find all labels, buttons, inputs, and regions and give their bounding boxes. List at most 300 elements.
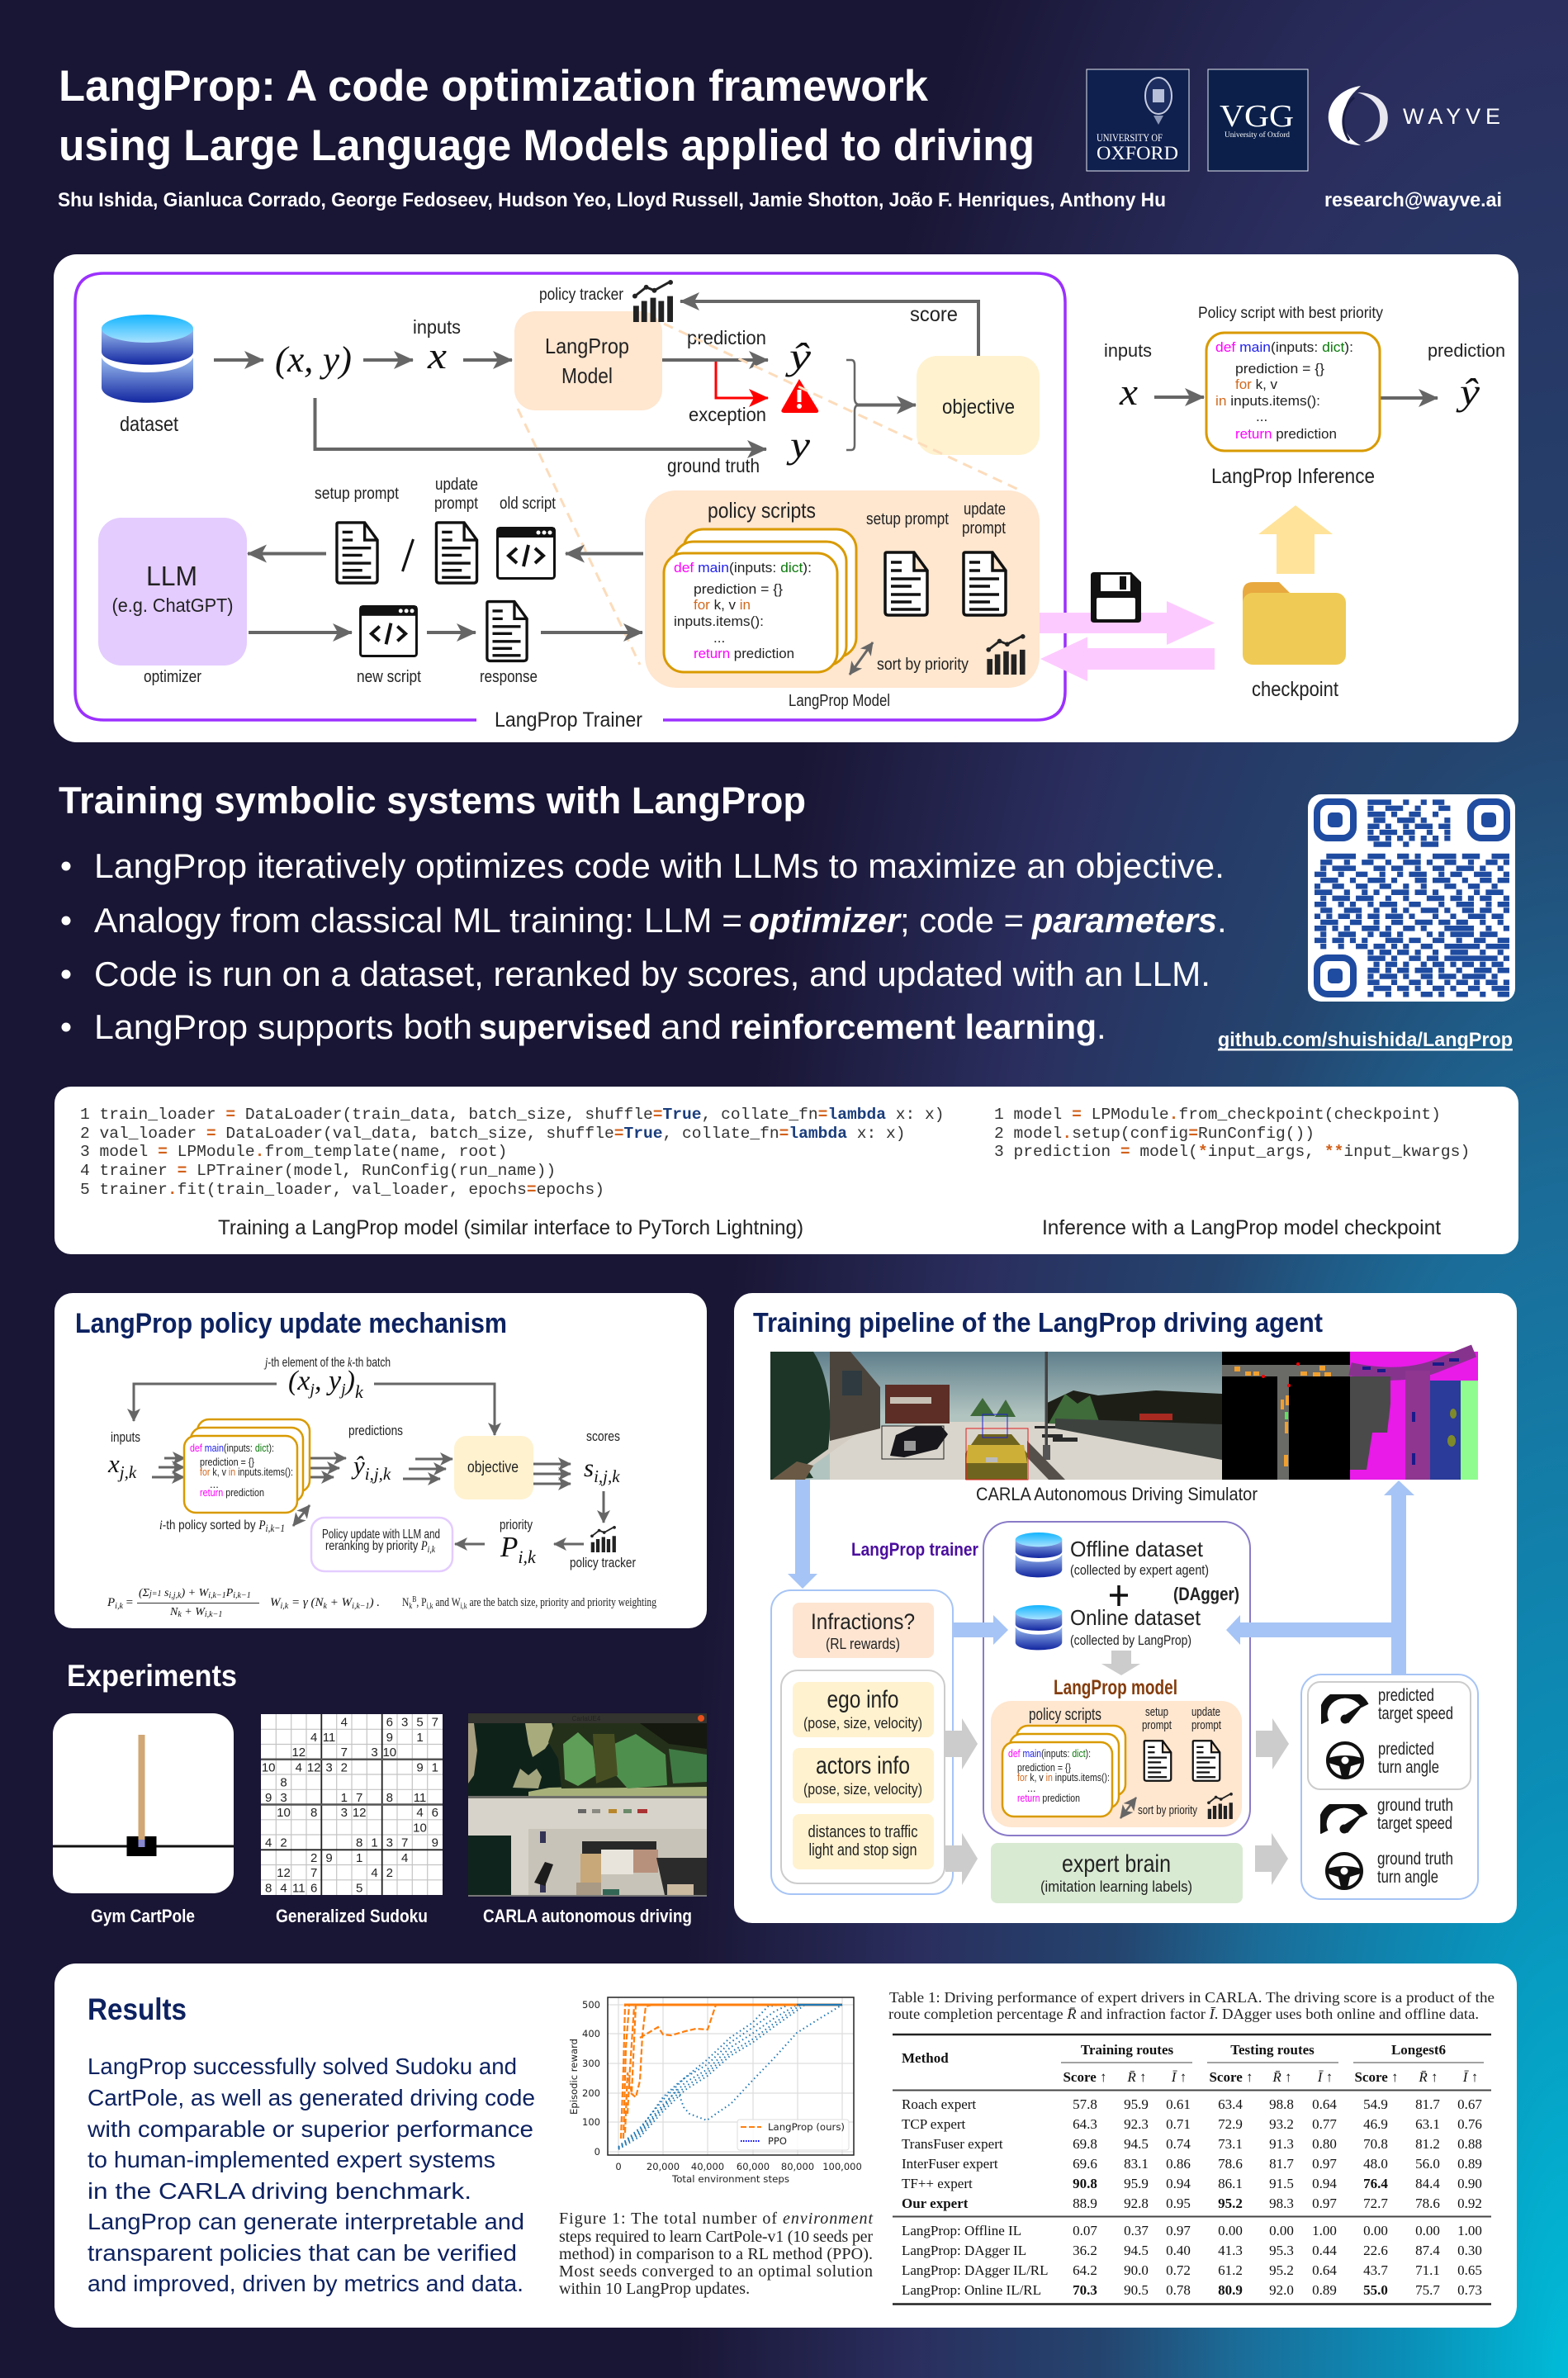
math: priority: i,k [518, 1547, 537, 1567]
image: Generalized Sudoku: 1 [416, 1731, 424, 1745]
icon: floppy disk [1091, 572, 1141, 623]
code snippet: inputs.items(): [674, 613, 764, 629]
container: datasets and model [983, 1522, 1250, 1836]
axis tick labels: 400 [582, 2028, 600, 2039]
panel: training pipeline [734, 1293, 1517, 1923]
header: contact email: research@wayve.ai [1324, 189, 1502, 211]
label: response: response [480, 668, 538, 686]
table header: Score ↑ [1209, 2069, 1253, 2085]
table rows: LangProp: 61.2 [1218, 2262, 1243, 2278]
icon: dataset [102, 315, 193, 403]
box: LLM: (e.g. ChatGPT) [112, 594, 233, 616]
label: online dataset: (collected by LangProp) [1070, 1632, 1191, 1648]
formula: priority update: P [107, 1596, 115, 1609]
code: inference: 3 prediction = model(*input_args, **input_kwargs) [994, 1143, 1470, 1161]
code: training: 1 train_loader = DataLoader(train_data, batch_size, shuffle=True, collate_fn=lambda x: x) [80, 1106, 945, 1124]
icon: offline dataset [1016, 1532, 1062, 1577]
image: Generalized Sudoku: 10 [382, 1746, 396, 1760]
table header: Ī ↑ [1462, 2069, 1478, 2085]
box: LangProp model: sort by priority [1138, 1803, 1197, 1817]
code: inference [994, 1106, 1470, 1161]
box: distances: distances to traffic [808, 1823, 918, 1841]
results summary text: LangProp can generate interpretable and [88, 2209, 524, 2234]
axis tick labels [582, 1999, 862, 2172]
icon: setup prompt doc [337, 523, 377, 583]
image: Generalized Sudoku: 8 [386, 1791, 393, 1805]
image: Generalized Sudoku: 8 [356, 1836, 362, 1850]
gray arrows: to outputs [945, 1718, 1289, 1885]
math: priority: P [500, 1531, 518, 1563]
box: LangProp model: def main(inputs: dict): [1008, 1748, 1091, 1760]
table rows: experts: 88.9 [1073, 2196, 1097, 2211]
table rows: experts: 0.64 [1312, 2096, 1337, 2112]
table rows: experts: 98.8 [1269, 2096, 1294, 2112]
panel: LangProp Model details: policy scripts [708, 498, 816, 523]
box: objective: objective [942, 396, 1015, 419]
table rows: experts: 0.67 [1457, 2096, 1482, 2112]
math: predictions: i,j,k [365, 1464, 391, 1484]
label: policy script with best priority: Policy script with best priority [1198, 305, 1383, 322]
y axis label: Episodic reward [568, 2039, 580, 2115]
table header: Method [902, 2050, 949, 2066]
series: PPO [618, 2005, 842, 2149]
table rows: experts: 48.0 [1363, 2156, 1388, 2172]
math: predictions: ŷ [353, 1451, 365, 1480]
formula: priority update: i,k [427, 1602, 433, 1611]
table rows: experts: 91.3 [1269, 2136, 1294, 2152]
image: Generalized Sudoku: 7 [341, 1746, 348, 1760]
table rows: experts: 54.9 [1363, 2096, 1388, 2112]
image: Generalized Sudoku: 9 [432, 1836, 438, 1850]
image: Generalized Sudoku: 2 [341, 1760, 348, 1774]
box: LLM: LLM [146, 561, 197, 591]
table header: R̄ ↑ [1126, 2069, 1147, 2085]
image: Generalized Sudoku: 7 [310, 1866, 317, 1880]
table header: Testing routes [1230, 2042, 1315, 2058]
icon: old script [497, 528, 555, 578]
logo: VGG [1208, 69, 1308, 171]
logo: VGG: VGG [1220, 99, 1294, 134]
arrow: checkpoint to inference [1258, 505, 1333, 574]
arrow: exception [716, 362, 768, 398]
results summary text: and improved, driven by metrics and data. [88, 2271, 523, 2296]
label: scores: scores [586, 1428, 620, 1444]
table rows: experts: 84.4 [1415, 2176, 1440, 2191]
bullet list [61, 846, 1227, 1046]
math: batch: , y [315, 1366, 342, 1396]
table rows: experts: 0.88 [1457, 2136, 1482, 2152]
table rows: LangProp: 94.5 [1124, 2243, 1149, 2258]
image: Generalized Sudoku: 9 [265, 1791, 272, 1805]
results summary text [87, 2054, 535, 2296]
formula: priority update: k [324, 1602, 328, 1611]
table rows: experts: 95.2 [1218, 2196, 1243, 2211]
label: old script: old script [500, 495, 556, 513]
formula: priority update: = γ (N [288, 1596, 324, 1609]
formula: priority update [107, 1587, 656, 1619]
table rows: experts: TF++ expert [902, 2176, 973, 2191]
box: objective: objective [467, 1459, 519, 1476]
formula: priority update: ) . [369, 1596, 380, 1609]
table rows: experts: 0.61 [1166, 2096, 1191, 2112]
box: policy update [311, 1518, 452, 1571]
image: Generalized Sudoku: 11 [414, 1791, 426, 1805]
table rows: experts: 63.1 [1415, 2116, 1440, 2132]
table rows: experts: 73.1 [1218, 2136, 1243, 2152]
code box: inference: for k, v [1235, 377, 1278, 392]
math: inputs: j,k [117, 1462, 137, 1482]
table rows: LangProp: 0.97 [1166, 2223, 1191, 2238]
table rows: experts: 83.1 [1124, 2156, 1149, 2172]
arrow: simulator to online dataset [1226, 1615, 1391, 1645]
formula: priority update: are the batch size, priority and priority weighting [467, 1596, 656, 1609]
label: offline dataset [1070, 1537, 1209, 1578]
box: actors info: actors info [816, 1752, 910, 1779]
table rows: experts: Our expert [902, 2196, 969, 2211]
header: title: using Large Language Models applied to driving [59, 121, 1035, 170]
table header: Training routes [1081, 2042, 1174, 2058]
bullet list: Code is run on a dataset, reranked by scores, and updated with an LLM. [94, 955, 1210, 993]
formula: priority update: i,k [115, 1602, 123, 1611]
formula: priority update: i,k [281, 1602, 289, 1611]
table rows: experts: 0.77 [1312, 2116, 1337, 2132]
code: training: 4 trainer = LPTrainer(model, RunConfig(run_name)) [80, 1162, 556, 1180]
arrow: simulator to trainer [788, 1480, 817, 1589]
logo: University of Oxford [1087, 69, 1189, 171]
table rows: experts: 0.71 [1166, 2116, 1191, 2132]
panel: results [54, 1964, 1517, 2328]
box: policy update: i,k [428, 1543, 436, 1555]
table rows: LangProp: LangProp: Offline IL [902, 2223, 1021, 2238]
code box: inference: prediction = {} [1235, 361, 1324, 377]
image: Generalized Sudoku: 3 [341, 1806, 348, 1820]
image: Generalized Sudoku: 6 [386, 1716, 393, 1730]
table rows: LangProp: 22.6 [1363, 2243, 1388, 2258]
table rows: experts: 69.6 [1073, 2156, 1097, 2172]
header: authors: Shu Ishida, Gianluca Corrado, George Fedoseev, Hudson Yeo, Lloyd Russell, Jamie Shotton, João F. Henriques, Anthony Hu [58, 189, 1166, 211]
container: outputs: target speed [1377, 1814, 1452, 1833]
box: LangProp Model: LangProp [545, 334, 629, 358]
arrows: inference [1154, 397, 1438, 398]
table rows: experts: Roach expert [902, 2096, 976, 2112]
math: batch: k [355, 1381, 364, 1402]
table caption: Table 1: Driving performance of expert drivers in CARLA. The driving score is a product of the [889, 1989, 1495, 2006]
image: CARLA aerial view [468, 1713, 707, 1897]
table rows: experts: 78.6 [1415, 2196, 1440, 2211]
table rows: experts: 98.3 [1269, 2196, 1294, 2211]
image: Generalized Sudoku: 4 [371, 1866, 378, 1880]
code snippet: return prediction [694, 646, 794, 661]
icon: tracker [590, 1526, 616, 1552]
formula: priority update: W [270, 1596, 281, 1609]
code box: inference [1206, 333, 1380, 451]
code snippet: prediction = {} [694, 581, 783, 597]
plus sign [1110, 1585, 1128, 1606]
label: DAgger: (DAgger) [1173, 1584, 1239, 1604]
axis tick labels: 40,000 [691, 2161, 724, 2172]
table rows: experts: 0.94 [1312, 2176, 1337, 2191]
image: Generalized Sudoku: 3 [325, 1760, 333, 1774]
labels: experiments: Generalized Sudoku [276, 1906, 428, 1926]
table rows: experts: 0.74 [1166, 2136, 1191, 2152]
icon: update prompt document [964, 552, 1006, 615]
box: distances: light and stop sign [809, 1841, 917, 1859]
formula: priority update: i,j,k [168, 1591, 182, 1600]
image: Generalized Sudoku: 6 [310, 1881, 317, 1895]
labels: experiments: Gym CartPole [91, 1906, 195, 1926]
bullet list: . [1217, 901, 1227, 940]
image: Generalized Sudoku: 10 [262, 1760, 276, 1774]
label: LangProp trainer: LangProp trainer [851, 1539, 978, 1560]
table rows: LangProp: 90.0 [1124, 2262, 1149, 2278]
axis tick labels: 0 [615, 2161, 622, 2172]
label: sorted policy: i,k−1 [266, 1522, 285, 1534]
image: Generalized Sudoku: 2 [310, 1851, 317, 1865]
bullet list: Analogy from classical ML training: LLM = [94, 901, 742, 940]
box: LangProp model: prompt [1142, 1718, 1172, 1732]
math: (x, y): (x, y) [275, 339, 352, 380]
formula: priority update: i,k [461, 1602, 467, 1611]
table rows: experts: 76.4 [1363, 2176, 1388, 2191]
heading: LangProp policy update mechanism [75, 1308, 507, 1339]
image: Generalized Sudoku: 4 [416, 1806, 424, 1820]
code: training: 2 val_loader = DataLoader(val_data, batch_size, shuffle=True, collate_fn=lambda x: x) [80, 1125, 906, 1143]
label: offline dataset: (collected by expert agent) [1070, 1562, 1209, 1578]
label: update prompt: prompt [434, 495, 478, 513]
x axis label: Total environment steps [671, 2173, 789, 2185]
table rows: experts: 0.94 [1166, 2176, 1191, 2191]
label: inputs: inputs [1104, 340, 1152, 361]
table rows: experts [902, 2096, 1482, 2211]
axis tick labels: 100,000 [822, 2161, 862, 2172]
box: LangProp model: update [1191, 1705, 1220, 1719]
label: simulator: CARLA Autonomous Driving Simulator [976, 1484, 1258, 1504]
formula: priority update: k [178, 1610, 182, 1619]
table rows: experts: 0.95 [1166, 2196, 1191, 2211]
table rows: LangProp: 0.00 [1269, 2223, 1294, 2238]
box: LangProp model: policy scripts [1029, 1706, 1101, 1724]
formula: priority update: , P [416, 1596, 427, 1609]
table rows: LangProp: 64.2 [1073, 2262, 1097, 2278]
image: Generalized Sudoku: 11 [323, 1731, 335, 1745]
panel: LangProp Model details: prompt [962, 519, 1006, 538]
table rows: LangProp: 0.37 [1124, 2223, 1149, 2238]
arrows: batch routing [134, 1384, 604, 1544]
container: outputs: turn angle [1378, 1758, 1439, 1777]
axis tick labels: 300 [582, 2058, 600, 2069]
label: priority: priority [500, 1517, 533, 1532]
table header: Ī ↑ [1171, 2069, 1187, 2085]
axis tick labels: 0 [595, 2146, 600, 2158]
formula: priority update: i,k−1 [208, 1591, 226, 1600]
header: title [59, 62, 1035, 170]
table rows: LangProp: 0.40 [1166, 2243, 1191, 2258]
formula: priority update: P [225, 1587, 234, 1599]
table rows: experts: InterFuser expert [902, 2156, 998, 2172]
image: Generalized Sudoku: 4 [280, 1881, 287, 1895]
results summary text: in the CARLA driving benchmark. [88, 2178, 471, 2204]
icon: new script [360, 606, 417, 656]
math: y: y [786, 424, 811, 466]
table rows: LangProp: 1.00 [1457, 2223, 1482, 2238]
icon: policy tracker [632, 280, 673, 322]
results summary text: CartPole, as well as generated driving code [88, 2085, 535, 2110]
dashed links [518, 324, 1022, 665]
chart legend: LangProp (ours) [768, 2121, 845, 2133]
figure caption: method) in comparison to a RL method (PPO). [559, 2245, 873, 2263]
arrows: LLM loop [248, 553, 643, 632]
policy stack [184, 1419, 310, 1513]
code snippet: def main(inputs: dict): [674, 560, 812, 576]
table rows: experts: 92.3 [1124, 2116, 1149, 2132]
box: LangProp model: return prediction [1017, 1793, 1080, 1804]
code: training [80, 1106, 945, 1199]
table rows: LangProp: LangProp: DAgger IL [902, 2243, 1026, 2258]
table rows: experts: 81.7 [1415, 2096, 1440, 2112]
label: LangProp model: LangProp model [1054, 1676, 1177, 1699]
chart legend: PPO [768, 2135, 787, 2147]
label: prediction: prediction [687, 327, 766, 348]
table rows: experts: 92.8 [1124, 2196, 1149, 2211]
label: online dataset: Online dataset [1070, 1605, 1201, 1630]
panel: LangProp Model details: sort by priority [877, 656, 969, 674]
table rows: experts: 78.6 [1218, 2156, 1243, 2172]
table rows: experts: 57.8 [1073, 2096, 1097, 2112]
figure caption: steps required to learn CartPole-v1 (10 seeds per [559, 2228, 873, 2246]
arrow: sort by priority [850, 642, 873, 675]
image: Generalized Sudoku: 8 [280, 1776, 287, 1790]
logo: Wayve: WAYVE [1403, 104, 1500, 129]
math: batch: j [339, 1381, 346, 1399]
table rows: experts: 0.89 [1457, 2156, 1482, 2172]
image: Generalized Sudoku [261, 1714, 443, 1895]
table header: R̄ ↑ [1272, 2069, 1292, 2085]
table rows: experts: 81.2 [1415, 2136, 1440, 2152]
box: LangProp model: ... [1027, 1783, 1035, 1794]
table rows: LangProp: 92.0 [1269, 2282, 1294, 2298]
math: inputs: x [108, 1449, 120, 1478]
table caption: route completion percentage R̄ and infraction factor Ī. DAgger uses both online and offline data. [888, 2006, 1479, 2022]
icon: folder checkpoint [1243, 582, 1346, 665]
code box: inference: def main(inputs: dict): [1215, 339, 1353, 355]
policy stack: for k, v in inputs.items(): [200, 1466, 293, 1478]
box: expert brain [991, 1843, 1243, 1903]
figure caption: within 10 LangProp updates. [559, 2280, 750, 2298]
code: training: 3 model = LPModule.from_template(name, root) [80, 1143, 507, 1161]
label: dataset: dataset [120, 413, 178, 436]
container: inputs [771, 1590, 953, 1894]
table header: R̄ ↑ [1418, 2069, 1438, 2085]
bullet list: ; code = [900, 901, 1024, 940]
arrows: save and load checkpoint [1040, 601, 1215, 681]
box: objective [917, 356, 1040, 455]
label: optimizer: optimizer [144, 668, 201, 686]
box: ego info: ego info [827, 1686, 898, 1713]
image: Generalized Sudoku: 10 [277, 1806, 291, 1820]
table rows: experts: 0.76 [1457, 2116, 1482, 2132]
axis tick labels: 60,000 [737, 2161, 770, 2172]
box: LangProp model: for k, v in inputs.items(): [1017, 1772, 1110, 1784]
label: checkpoint: checkpoint [1252, 678, 1338, 701]
container: outputs: predicted [1378, 1686, 1434, 1705]
container: outputs: predicted [1378, 1740, 1434, 1759]
table rows: LangProp: 36.2 [1073, 2243, 1097, 2258]
math: batch: (x [288, 1366, 310, 1396]
box: LangProp model: prompt [1191, 1718, 1222, 1732]
logo: University of Oxford: OXFORD [1097, 143, 1178, 163]
image: Generalized Sudoku: 3 [401, 1716, 408, 1730]
heading: experiments: Experiments [67, 1659, 237, 1693]
label: policy tracker: policy tracker [539, 286, 623, 304]
logo: Wayve [1329, 86, 1500, 145]
labels: experiments: CARLA autonomous driving [483, 1906, 692, 1926]
arrows: dataset flow [214, 301, 978, 450]
math: y hat: ŷ [1456, 371, 1480, 413]
formula: priority update: = [123, 1596, 133, 1609]
table: driving performance [893, 2035, 1491, 2304]
table rows: experts: 91.5 [1269, 2176, 1294, 2191]
table rows: experts: 69.8 [1073, 2136, 1097, 2152]
icon: setup prompt document [885, 552, 927, 615]
results summary text: transparent policies that can be verified [88, 2240, 517, 2266]
panel: code usage [54, 1087, 1518, 1254]
figure caption: Figure 1: The total number of environment [559, 2210, 873, 2228]
panel: LangProp Model details: update [964, 500, 1006, 519]
container: inputs: Infractions? [811, 1609, 915, 1634]
logo: University of Oxford: UNIVERSITY OF [1097, 131, 1163, 144]
bullet list: . [1097, 1007, 1106, 1046]
bullet list: optimizer [749, 901, 902, 940]
image: Generalized Sudoku: 1 [371, 1836, 378, 1850]
box: policy update: reranking by priority P [325, 1539, 441, 1553]
caption: inference: Inference with a LangProp model checkpoint [1042, 1216, 1441, 1239]
table rows: LangProp: 70.3 [1073, 2282, 1097, 2298]
box: LangProp model [991, 1701, 1242, 1827]
policy stack: prediction = {} [200, 1456, 255, 1468]
container: outputs [1301, 1675, 1478, 1899]
image: Generalized Sudoku: 2 [280, 1836, 287, 1850]
table rows: experts: 81.7 [1269, 2156, 1294, 2172]
label: inputs: inputs [413, 316, 461, 338]
image: Generalized Sudoku: 9 [416, 1760, 424, 1774]
label: LangProp Inference: LangProp Inference [1211, 465, 1375, 488]
axis tick labels: 20,000 [647, 2161, 680, 2172]
code: inference: 1 model = LPModule.from_checkpoint(checkpoint) [994, 1106, 1441, 1124]
formula: priority update: (Σj=1 s [139, 1587, 168, 1599]
image: Generalized Sudoku: 4 [341, 1716, 348, 1730]
image: Generalized Sudoku: 4 [401, 1851, 408, 1865]
label: exception: exception [689, 404, 766, 425]
table rows: experts: 46.9 [1363, 2116, 1388, 2132]
table rows: LangProp: 0.07 [1073, 2223, 1097, 2238]
formula: priority update: ) + W [180, 1587, 210, 1599]
label: score: score [910, 303, 958, 326]
table rows: experts: 0.97 [1312, 2156, 1337, 2172]
bullet list: parameters [1031, 901, 1217, 940]
math: scores: i,j,k [594, 1466, 620, 1486]
icon: speed gauge [1324, 1694, 1366, 1724]
arrow: datasets to model [1101, 1651, 1140, 1675]
header: title: LangProp: A code optimization framework [59, 62, 929, 111]
table rows: LangProp: 95.2 [1269, 2262, 1294, 2278]
table rows: LangProp: 87.4 [1415, 2243, 1440, 2258]
formula: priority update: N [402, 1596, 411, 1609]
code snippet: for k, v in [694, 597, 751, 613]
icon: steering wheel [1328, 1743, 1362, 1778]
image: Generalized Sudoku: 12 [291, 1746, 306, 1760]
panel: LangProp architecture diagram [54, 254, 1518, 742]
math: batch: j [307, 1381, 315, 1399]
